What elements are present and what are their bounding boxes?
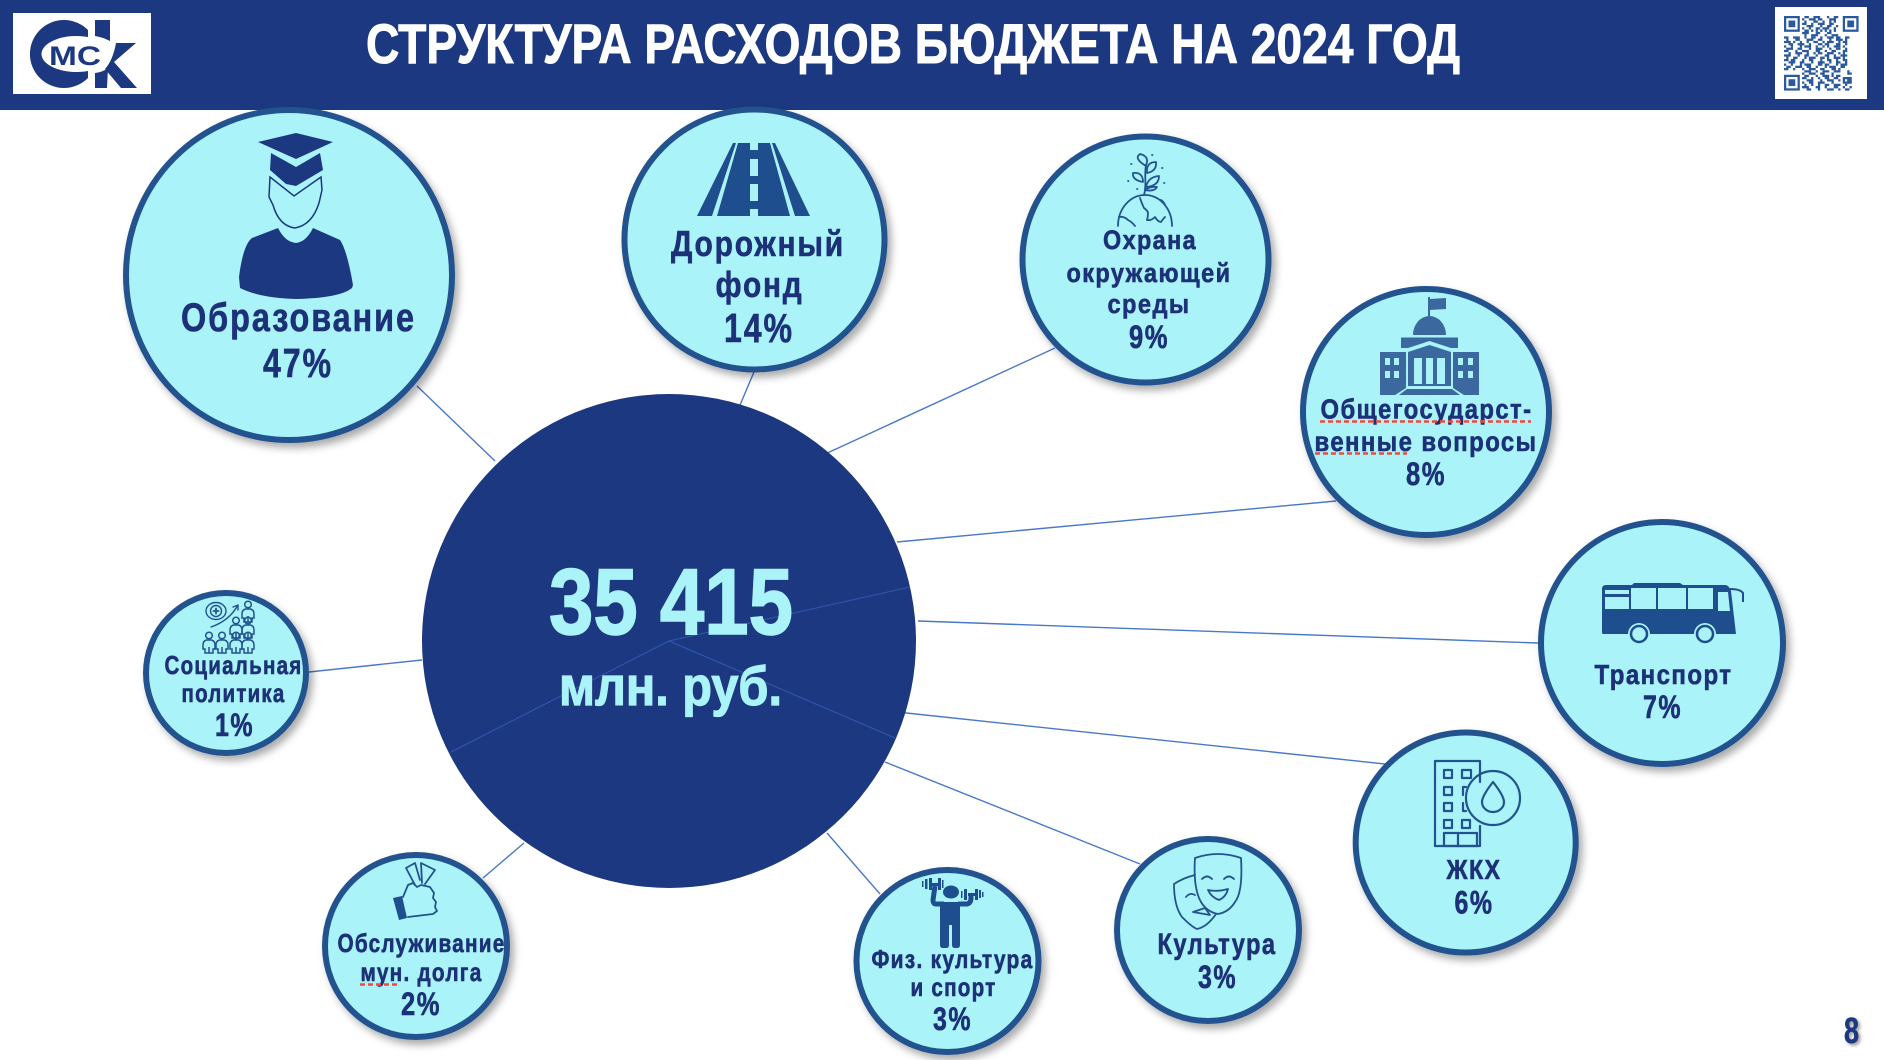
panel: housing and utilities 6% — [1356, 732, 1576, 952]
label: окружающей — [1066, 258, 1232, 288]
label — [1066, 225, 1232, 319]
icon: theatre masks — [1174, 854, 1241, 929]
label — [872, 944, 1034, 1002]
label: Обслуживание — [338, 928, 506, 958]
label: Социальная — [164, 650, 302, 680]
label — [671, 223, 845, 305]
label: венные вопросы — [1314, 426, 1538, 457]
label: и спорт — [910, 972, 996, 1002]
panel: environment 9% — [1022, 136, 1268, 382]
label: Образование — [181, 296, 416, 340]
QR code — [1775, 7, 1867, 99]
label: Культура — [1158, 928, 1276, 961]
value: 6% — [1454, 884, 1494, 920]
icon: bus — [1602, 583, 1743, 645]
panel: road fund 14% — [624, 110, 884, 370]
icon: hand with money — [393, 863, 437, 920]
icon: people and growth arrow — [203, 601, 254, 653]
panel: culture 3% — [1117, 839, 1299, 1021]
label: Транспорт — [1594, 659, 1732, 690]
value: 8% — [1406, 456, 1446, 492]
value: 3% — [933, 1001, 972, 1037]
panel: transport 7% — [1541, 522, 1783, 764]
label: политика — [182, 678, 286, 708]
panel: general government 8% — [1303, 289, 1549, 535]
icon: building with drop — [1435, 761, 1520, 846]
panel: municipal debt service 2% — [325, 855, 507, 1037]
value: 47% — [263, 340, 333, 386]
central circle: total budget — [422, 394, 916, 888]
label — [164, 650, 302, 708]
icon: weightlifter — [922, 878, 984, 948]
label: фонд — [716, 264, 804, 305]
panel: social policy 1% — [146, 593, 306, 753]
label: Охрана — [1103, 225, 1197, 255]
label: Физ. культура — [872, 944, 1034, 974]
icon: government building — [1380, 297, 1479, 395]
label — [338, 928, 506, 987]
label — [1314, 394, 1538, 457]
icon: plant on globe — [1118, 154, 1172, 226]
icon: road — [697, 143, 810, 216]
page number: 8 — [1844, 1010, 1859, 1051]
label: мун. долга — [360, 957, 482, 987]
title: СТРУКТУРА РАСХОДОВ БЮДЖЕТА НА 2024 ГОД — [366, 12, 1460, 75]
unit: млн. руб. — [559, 655, 782, 717]
icon: graduate — [239, 133, 353, 299]
label: ЖКХ — [1446, 854, 1502, 885]
connector lines — [309, 348, 1538, 894]
header bar — [0, 0, 1884, 110]
panel: physical culture and sport 3% — [856, 870, 1038, 1052]
logo — [13, 13, 151, 94]
value: 7% — [1643, 689, 1682, 725]
value: 9% — [1129, 319, 1169, 355]
label: Дорожный — [671, 223, 845, 264]
value: 14% — [724, 305, 794, 351]
panel: education 47% — [126, 110, 452, 440]
logo: МС — [49, 41, 101, 71]
total amount: 35 415 — [549, 549, 793, 654]
value: 1% — [215, 707, 254, 743]
label: Общегосударст- — [1320, 394, 1532, 424]
label: среды — [1108, 289, 1190, 319]
value: 3% — [1198, 959, 1237, 995]
value: 2% — [401, 986, 441, 1022]
